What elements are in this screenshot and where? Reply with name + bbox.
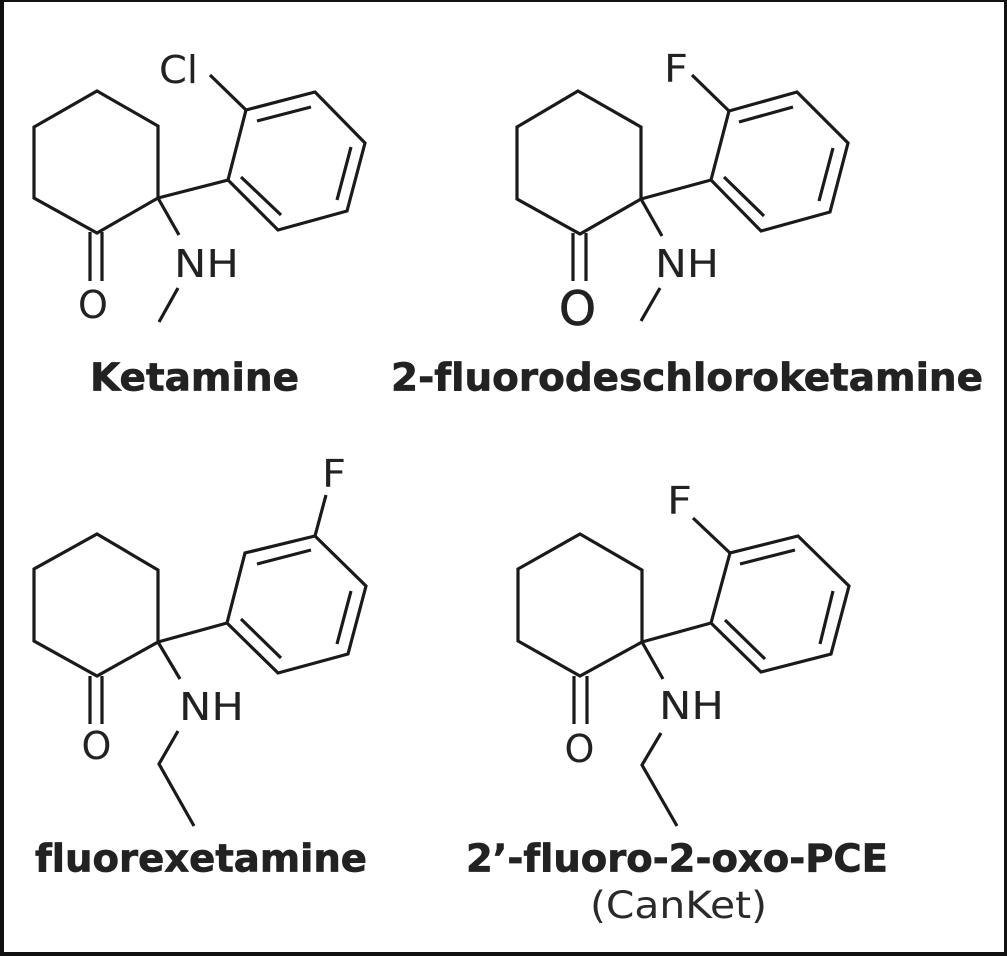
molecule: 2-fluorodeschloroketamine structure: F <box>664 47 688 91</box>
molecule: 2'-fluoro-2-oxo-PCE structure: F <box>667 479 692 523</box>
panel: 2-fluorodeschloroketamine <box>391 47 983 400</box>
label: CanKet: (CanKet) <box>590 884 767 927</box>
molecule: ketamine structure: Cl <box>159 48 198 92</box>
molecule: fluorexetamine structure: NH <box>179 685 244 729</box>
label: 2-fluorodeschloroketamine: 2-fluorodeschloroketamine <box>391 356 983 400</box>
molecule: fluorexetamine structure <box>34 452 366 826</box>
molecule: 2-fluorodeschloroketamine structure: O <box>559 282 596 337</box>
molecule: ketamine structure: O <box>78 283 108 327</box>
molecule: 2'-fluoro-2-oxo-PCE structure <box>518 479 849 826</box>
molecule: ketamine structure <box>34 48 365 327</box>
panel: fluorexetamine <box>34 452 367 880</box>
molecule: fluorexetamine structure: O <box>82 724 111 768</box>
panel: Ketamine <box>34 48 365 400</box>
molecule: fluorexetamine structure: F <box>322 452 346 496</box>
panel: 2'-fluoro-2-oxo-PCE (CanKet) <box>466 479 888 927</box>
molecule: 2-fluorodeschloroketamine structure: NH <box>655 242 719 286</box>
label: Ketamine: Ketamine <box>90 356 299 400</box>
molecule: 2-fluorodeschloroketamine structure <box>517 47 848 337</box>
molecule: 2'-fluoro-2-oxo-PCE structure: NH <box>659 684 724 728</box>
label: fluorexetamine: fluorexetamine <box>35 836 367 880</box>
molecule: ketamine structure: NH <box>174 242 239 286</box>
molecule: 2'-fluoro-2-oxo-PCE structure: O <box>564 727 594 771</box>
label: 2'-fluoro-2-oxo-PCE: 2’-fluoro-2-oxo-PCE <box>466 836 888 880</box>
